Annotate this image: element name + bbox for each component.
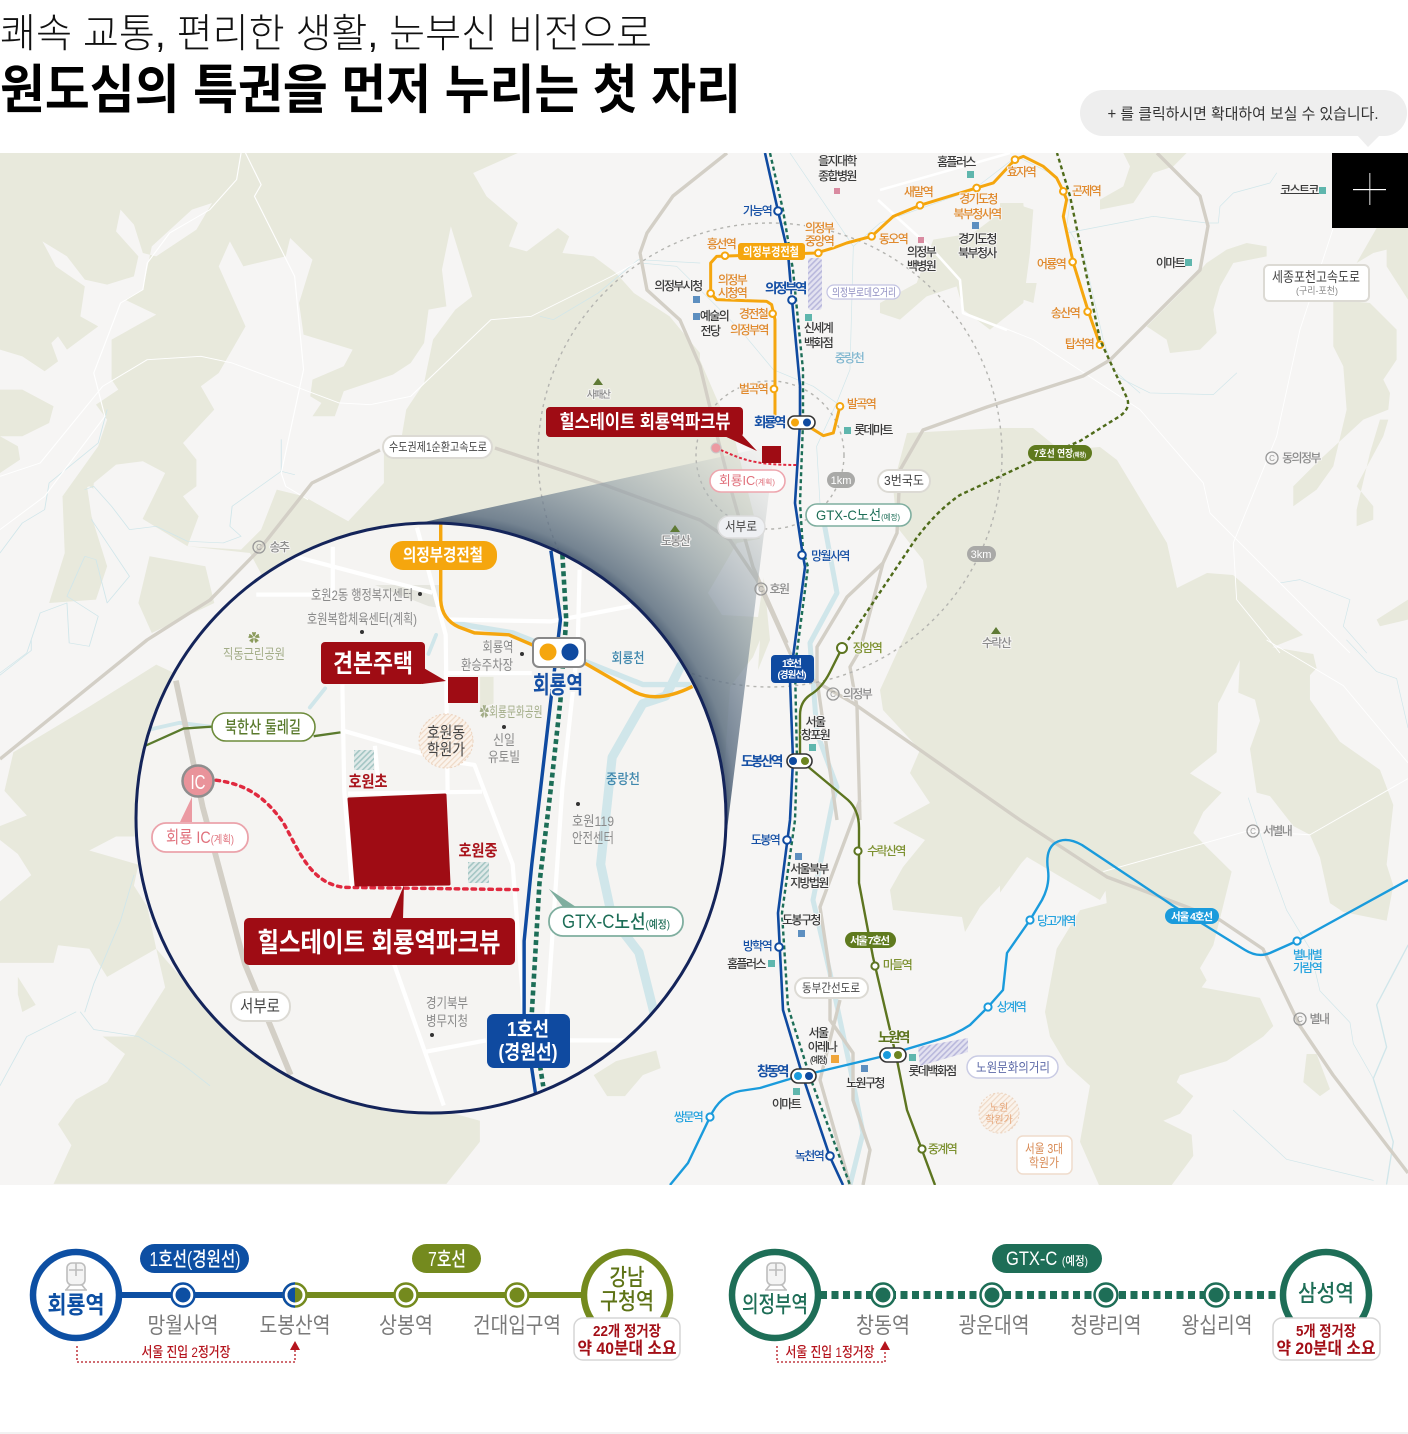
map: station and landmark labels: 당고개역 bbox=[1037, 914, 1075, 928]
map: rivers bbox=[0, 153, 1408, 1185]
map: station and landmark labels: 의정부 bbox=[718, 273, 748, 287]
map: station and landmark labels: 별내별 bbox=[1293, 948, 1322, 962]
line: subway 7 extension dashed bbox=[848, 153, 1128, 640]
label: 회룡IC mini bbox=[710, 470, 785, 492]
inset: Seobu-ro label: 서부로 bbox=[240, 997, 280, 1016]
terminal: Uijeongbu station bbox=[732, 1252, 818, 1338]
label: Seoul top 3 academy: 학원가 bbox=[1029, 1156, 1059, 1170]
stop: Wangsimni: 왕십리역 bbox=[1182, 1313, 1252, 1338]
time box: 22 stops: 약 40분대 소요 bbox=[578, 1339, 676, 1358]
map: station and landmark labels: 이마트 bbox=[772, 1097, 802, 1111]
map: station and landmark labels: 노원역 bbox=[878, 1030, 910, 1045]
map: stations bbox=[706, 207, 1301, 1160]
annotation: Seoul entry 1 stop: 서울 진입 1정거장 bbox=[786, 1344, 875, 1360]
inset: Hoown middle school: 호원중 bbox=[458, 842, 498, 860]
map: station and landmark labels: 탑석역 bbox=[1065, 337, 1094, 351]
map: green terrain bbox=[0, 153, 1408, 1187]
inset: text labels: 직동근린공원 bbox=[223, 646, 285, 662]
time box: 22 stops bbox=[574, 1318, 680, 1360]
inset: IC bbox=[152, 766, 248, 852]
inset: Hoeryong capsule bbox=[533, 638, 585, 667]
terminal: Uijeongbu station: 의정부역 bbox=[742, 1291, 808, 1317]
label: line 7 extension: 7호선 연장(예정) bbox=[1034, 447, 1086, 460]
inset: rivers bbox=[145, 623, 689, 1014]
inset: text labels: 호원119 bbox=[572, 813, 614, 829]
label: 서부로 mini bbox=[718, 516, 765, 538]
inset: text labels: 회룡역 bbox=[482, 639, 514, 655]
map: station and landmark labels: 새말역 bbox=[904, 185, 933, 199]
inset: IC: IC bbox=[190, 772, 206, 794]
map: station and landmark labels: 홈플러스 bbox=[937, 155, 976, 169]
inset: Bukhansan trail label: 북한산 둘레길 bbox=[225, 718, 301, 737]
map: station and landmark labels: 서별내 bbox=[1263, 824, 1292, 838]
inset: GTX-C label bbox=[549, 889, 683, 936]
annotation: Seoul entry 2 stops bbox=[77, 1341, 300, 1362]
stop: Wangsimni bbox=[1182, 1284, 1252, 1338]
stop: Konkuk Univ: 건대입구역 bbox=[473, 1313, 561, 1338]
map: station and landmark labels: 백화점 bbox=[804, 336, 833, 350]
label: 3km bbox=[967, 546, 996, 562]
map: station and landmark labels: 장암역 bbox=[853, 641, 882, 655]
stop: Mangwolsa bbox=[148, 1284, 218, 1338]
title line 2: 원도심의 특권을 먼저 누리는 첫 자리 bbox=[0, 61, 741, 120]
map: station and landmark labels: 창포원 bbox=[801, 728, 830, 742]
inset: text labels: 유토빌 bbox=[488, 749, 520, 765]
map: station and landmark labels: 지방법원 bbox=[790, 876, 828, 890]
label: 서부로 mini: 서부로 bbox=[725, 519, 757, 534]
map: station and landmark labels: 송추 bbox=[270, 540, 290, 554]
map: station and landmark labels: 가능역 bbox=[743, 204, 772, 218]
map: station and landmark labels: 효자역 bbox=[1007, 165, 1036, 179]
label: Sejong Pocheon expressway bbox=[1264, 265, 1369, 301]
stop: Changdong bbox=[856, 1284, 910, 1338]
terminal: Samseong bbox=[1283, 1252, 1369, 1338]
route diagram: Hoeryong to Gangnam-gu Office bbox=[33, 1244, 680, 1362]
inset: academy circle: 호원동 bbox=[427, 724, 465, 742]
pill labels on map bbox=[383, 243, 1369, 1174]
map: icons (mountains, interchanges, facilities): C bbox=[256, 543, 262, 552]
label: LRT: 의정부경전철 bbox=[743, 245, 799, 259]
map: station and landmark labels: 코스트코 bbox=[1280, 183, 1319, 197]
label: GTX-C: GTX-C (예정) bbox=[1006, 1249, 1088, 1270]
label: expressway 1: 수도권제1순환고속도로 bbox=[389, 440, 487, 454]
map: station and landmark labels: 아레나 bbox=[808, 1040, 838, 1054]
map: station and landmark labels: 예술의 bbox=[700, 309, 729, 323]
map: station and landmark labels: 의정부 bbox=[805, 221, 835, 235]
label: Seoul top 3 academy: 서울 3대 bbox=[1025, 1142, 1063, 1156]
time box: 5 stops: 약 20분대 소요 bbox=[1276, 1339, 1376, 1358]
map: station and landmark labels: 곤제역 bbox=[1072, 184, 1101, 198]
label: GTX-C bbox=[992, 1244, 1102, 1273]
label: Nowon culture street bbox=[967, 1056, 1058, 1078]
icon: train bbox=[765, 1263, 787, 1290]
map: station and landmark labels: 동의정부 bbox=[1282, 451, 1321, 465]
terminal: Gangnam-gu Office: 구청역 bbox=[600, 1288, 654, 1314]
magnifier shade bbox=[415, 445, 775, 830]
map: station and landmark labels: 회룡역 bbox=[754, 415, 786, 430]
label: Seoul top 3 academy bbox=[1017, 1136, 1072, 1174]
annotation: Seoul entry 1 stop bbox=[777, 1341, 890, 1362]
label: line 4 bbox=[1165, 908, 1219, 924]
map: icons (mountains, interchanges, facilities): C bbox=[830, 690, 836, 699]
map: station and landmark labels: 마들역 bbox=[883, 958, 912, 972]
map: station and landmark labels: 서울북부 bbox=[790, 862, 829, 876]
inset: GTX-C label: GTX-C노선(예정) bbox=[562, 911, 670, 933]
label: Dongbu expressway: 동부간선도로 bbox=[802, 981, 860, 995]
route diagram: Uijeongbu to Samseong bbox=[732, 1244, 1380, 1362]
inset: IC: 회룡 IC(계획) bbox=[166, 828, 234, 847]
label: line 1 box: (경원선) bbox=[778, 669, 806, 681]
annotation: Seoul entry 2 stops: 서울 진입 2정거장 bbox=[142, 1344, 231, 1360]
inset: LRT label: 의정부경전철 bbox=[403, 546, 483, 565]
map: station and landmark labels: 어룡역 bbox=[1037, 257, 1066, 271]
label: Nowon academy: 학원가 bbox=[985, 1114, 1013, 1126]
label: expressway 1 bbox=[383, 436, 492, 458]
line: subway 4 bbox=[670, 840, 1408, 1185]
inset: text labels: 환승주차장 bbox=[461, 657, 513, 673]
map: station and landmark labels: 쌍문역 bbox=[674, 1110, 703, 1124]
stop: Sangbong: 상봉역 bbox=[379, 1313, 433, 1338]
map: station and landmark labels: 의정부역 bbox=[730, 323, 768, 337]
map: station and landmark labels: 경기도청 bbox=[958, 232, 996, 246]
map: station and landmark labels: 망월사역 bbox=[811, 549, 849, 563]
callout: zoom hint bbox=[1080, 90, 1407, 147]
map: station and landmark labels: 수락산역 bbox=[867, 844, 905, 858]
inset: site and callout: 힐스테이트 회룡역파크뷰 bbox=[258, 928, 500, 958]
inset line: subway 1 bbox=[524, 551, 560, 1094]
map: station and landmark labels: (예정) bbox=[810, 1054, 828, 1065]
map: station and landmark labels: 신세계 bbox=[804, 321, 833, 335]
label: Hillstate mini bbox=[546, 407, 743, 437]
interchange: Changdong bbox=[791, 1069, 816, 1083]
label: line 7: 7호선 bbox=[428, 1248, 466, 1271]
terminal: Samseong: 삼성역 bbox=[1298, 1280, 1354, 1306]
stop: Cheongnyangni: 청량리역 bbox=[1070, 1313, 1142, 1338]
interchange: Dobongsan bbox=[787, 754, 812, 768]
inset: Hoeryong station name: 회룡역 bbox=[533, 672, 583, 699]
map: station and landmark labels: 중랑천 bbox=[835, 350, 864, 365]
terminal: Gangnam-gu Office: 강남 bbox=[610, 1264, 644, 1290]
inset: text labels: 경기북부 bbox=[426, 995, 468, 1011]
inset: text labels bbox=[223, 587, 644, 1037]
label: Sejong Pocheon expressway: 세종포천고속도로 bbox=[1272, 269, 1360, 285]
map: station and landmark labels: 도봉산 bbox=[661, 534, 691, 548]
line: Uijeongbu LRT bbox=[707, 156, 1103, 436]
label: line 7: 서울 7호선 bbox=[850, 934, 890, 947]
map: station and landmark labels: 중앙역 bbox=[805, 234, 834, 248]
line: subway 7 bbox=[800, 648, 935, 1185]
inset: model house bbox=[321, 642, 478, 703]
label: 3번국도: 3번국도 bbox=[884, 473, 924, 488]
label: GTX-C mini: GTX-C노선(예정) bbox=[816, 507, 900, 523]
inset: text labels: ✿회룡문화공원 bbox=[480, 704, 542, 720]
map: station and landmark labels: 의정부 bbox=[843, 687, 873, 701]
inset: green patches bbox=[375, 585, 440, 608]
stop: Gwangwoon Univ bbox=[958, 1284, 1030, 1338]
label: 3번국도 bbox=[878, 470, 930, 492]
icon: train bbox=[65, 1263, 87, 1290]
map: station and landmark labels: 북부청사역 bbox=[953, 207, 1001, 221]
inset: Seobu-ro label bbox=[231, 992, 290, 1021]
label: line 1: 1호선(경원선) bbox=[150, 1248, 240, 1271]
inset: text labels: 회룡천 bbox=[612, 650, 644, 666]
inset line: GTX-C bbox=[532, 554, 566, 1086]
inset: text labels: 중랑천 bbox=[606, 771, 640, 787]
map: station and landmark labels: 백병원 bbox=[907, 259, 936, 273]
map: station and landmark labels: 북부청사 bbox=[958, 246, 997, 260]
inset: line 1 box: 1호선 bbox=[507, 1018, 549, 1041]
map: station and landmark labels: 흥선역 bbox=[707, 236, 736, 251]
map: station and landmark labels: 호원 bbox=[770, 582, 789, 596]
map: station and landmark labels: 종합병원 bbox=[818, 168, 856, 183]
stop: Cheongnyangni bbox=[1070, 1284, 1142, 1338]
map: station and landmark labels: 발곡역 bbox=[847, 397, 876, 411]
zoom button bbox=[1332, 153, 1408, 228]
label: Sejong Pocheon expressway: (구리-포천) bbox=[1296, 286, 1338, 297]
map: station and landmark labels: 녹천역 bbox=[795, 1148, 824, 1163]
time box: 5 stops bbox=[1273, 1318, 1380, 1360]
map: station and landmark labels: 상계역 bbox=[997, 1000, 1026, 1014]
map: station and landmark labels: 동오역 bbox=[879, 232, 908, 246]
mini site marker bbox=[546, 407, 797, 465]
inset: text labels: 신일 bbox=[493, 732, 515, 748]
map: station and landmark labels: 의정부 bbox=[907, 245, 937, 259]
label: line 1 box: 1호선 bbox=[782, 657, 802, 670]
map: icons (mountains, interchanges, facilities): C bbox=[1250, 827, 1256, 836]
label: GTX-C mini bbox=[806, 504, 911, 526]
inset: Bukhansan trail label bbox=[212, 713, 315, 741]
route line: blue then olive bbox=[120, 1292, 587, 1298]
label: Dongbu expressway bbox=[795, 978, 868, 998]
stop: Dobongsan bbox=[260, 1284, 330, 1338]
stop: Sangbong bbox=[379, 1284, 433, 1338]
map: station and landmark labels: 시청역 bbox=[718, 286, 747, 300]
label: Rodeo street bbox=[827, 285, 900, 299]
inset: text labels: 호원복합체육센터(계획) bbox=[307, 611, 417, 627]
inset: Hoown elementary school bbox=[348, 750, 388, 791]
title line 1: 쾌속 교통, 편리한 생활, 눈부신 비전으로 bbox=[0, 12, 652, 56]
map: station and landmark labels: 도봉산역 bbox=[741, 754, 783, 769]
time box: 22 stops: 22개 정거장 bbox=[593, 1323, 661, 1340]
map: icons (mountains, interchanges, facilities): C bbox=[758, 585, 764, 594]
map: station and landmark labels: 롯데마트 bbox=[854, 423, 893, 437]
callout: zoom hint: + 를 클릭하시면 확대하여 보실 수 있습니다. bbox=[1108, 105, 1378, 123]
map: station and landmark labels: 롯데백화점 bbox=[908, 1064, 956, 1078]
map: station and landmark labels: 의정부역 bbox=[765, 281, 807, 296]
label: line 7 bbox=[412, 1244, 481, 1273]
stop: Gwangwoon Univ: 광운대역 bbox=[958, 1313, 1030, 1338]
inset: site and callout bbox=[244, 795, 515, 965]
map: station and landmark labels: 송산역 bbox=[1051, 306, 1080, 320]
map: station and landmark labels: 창동역 bbox=[757, 1064, 789, 1079]
map: station and landmark labels: 전당 bbox=[701, 324, 721, 338]
label: 3km: 3km bbox=[971, 549, 991, 561]
label: 1km: 1km bbox=[831, 475, 851, 487]
inset route: planned IC road bbox=[216, 780, 518, 890]
map: station and landmark labels: 사패산 bbox=[587, 389, 611, 401]
map: station and landmark labels: 이마트 bbox=[1156, 256, 1186, 270]
stop: Mangwolsa: 망월사역 bbox=[148, 1313, 218, 1338]
inset: LRT label bbox=[390, 541, 497, 570]
inset line: Bukhansan trail bbox=[145, 727, 340, 746]
mini site marker: 힐스테이트 회룡역파크뷰 bbox=[560, 411, 730, 433]
map: station and landmark labels: 서울 bbox=[809, 1026, 829, 1040]
stop: Changdong: 창동역 bbox=[856, 1313, 910, 1338]
inset line: LRT bbox=[441, 520, 692, 697]
map panel bbox=[0, 153, 1408, 1187]
inset: line 1 box bbox=[487, 1014, 570, 1068]
map: station and landmark labels: 노원구청 bbox=[846, 1076, 884, 1090]
map: Rodeo street and culture street hatching bbox=[808, 258, 1019, 1133]
map: station and landmark labels: 가람역 bbox=[1293, 961, 1322, 975]
label: Nowon culture street: 노원문화의거리 bbox=[976, 1060, 1050, 1075]
map: station and landmark labels: 경기도청 bbox=[959, 192, 997, 206]
stop: Konkuk Univ bbox=[473, 1284, 561, 1338]
map: icons (mountains, interchanges, facilities): C bbox=[1297, 1015, 1303, 1024]
map: station and landmark labels: 도봉역 bbox=[751, 833, 780, 847]
map: 1km and 3km range rings bbox=[538, 223, 1002, 687]
label: Nowon academy bbox=[986, 1102, 1012, 1124]
title bbox=[0, 12, 741, 120]
map: icons (mountains, interchanges, facilities) bbox=[253, 171, 1326, 1095]
line: GTX-C dashed bbox=[770, 153, 850, 1185]
map: station and landmark labels: 경전철 bbox=[739, 307, 768, 321]
map: station and landmark labels: 방학역 bbox=[743, 938, 772, 953]
map: station and landmark labels: 서울 bbox=[806, 715, 826, 729]
inset: text labels: ✿ bbox=[248, 631, 260, 645]
map: station and landmark labels: 별내 bbox=[1310, 1012, 1329, 1026]
terminal: Hoeryong station bbox=[33, 1252, 119, 1338]
label: 1km bbox=[827, 472, 855, 488]
line: subway 1 bbox=[765, 153, 843, 1185]
terminal: Hoeryong station: 회룡역 bbox=[48, 1292, 104, 1319]
label: line 7 bbox=[845, 932, 896, 948]
inset: Hoown elementary school: 호원초 bbox=[348, 773, 388, 791]
map: station and landmark labels bbox=[270, 153, 1329, 1163]
map: station and landmark labels: 벌곡역 bbox=[739, 382, 768, 396]
inset: model house: 견본주택 bbox=[333, 650, 413, 678]
label: line 4: 서울 4호선 bbox=[1171, 910, 1213, 923]
map: icons (mountains, interchanges, facilities): C bbox=[1269, 454, 1275, 463]
stop: Dobongsan: 도봉산역 bbox=[260, 1313, 330, 1338]
interchange: Hoeryong bbox=[788, 416, 815, 429]
label: Nowon academy: 노원 bbox=[990, 1102, 1008, 1114]
inset: text labels: 호원2동 행정복지센터 bbox=[311, 587, 413, 603]
inset: academy circle bbox=[419, 714, 473, 768]
map: station and landmark labels: 도봉구청 bbox=[782, 913, 820, 927]
time box: 5 stops: 5개 정거장 bbox=[1296, 1323, 1356, 1340]
inset: line 1 box: (경원선) bbox=[498, 1041, 558, 1064]
inset: roads bbox=[256, 528, 666, 1105]
label: line 1 bbox=[140, 1244, 249, 1273]
map: station and landmark labels: 수락산 bbox=[982, 636, 1012, 650]
label: 회룡IC mini: 회룡IC(계획) bbox=[719, 473, 775, 488]
interchange: Nowon bbox=[880, 1048, 906, 1062]
inset: text labels: 병무지청 bbox=[426, 1013, 468, 1029]
map: station and landmark labels: 중계역 bbox=[928, 1142, 957, 1156]
label: Rodeo street: 의정부로데오거리 bbox=[832, 286, 896, 299]
magnifier circle inset bbox=[136, 520, 726, 1121]
label: line 7 extension bbox=[1028, 445, 1092, 461]
route line: GTX-C dashed bbox=[820, 1291, 1282, 1299]
map: station and landmark labels: 홈플러스 bbox=[727, 957, 766, 971]
map: roads bbox=[0, 153, 1408, 1185]
map: station and landmark labels: 의정부시청 bbox=[654, 279, 702, 293]
inset: academy circle: 학원가 bbox=[427, 741, 465, 759]
map: station and landmark labels: 을지대학 bbox=[818, 153, 857, 168]
terminal: Gangnam-gu Office bbox=[584, 1252, 670, 1338]
inset: Hoown middle school bbox=[458, 842, 498, 883]
label: line 1 box bbox=[771, 655, 814, 683]
inset: text labels: 안전센터 bbox=[572, 830, 614, 846]
